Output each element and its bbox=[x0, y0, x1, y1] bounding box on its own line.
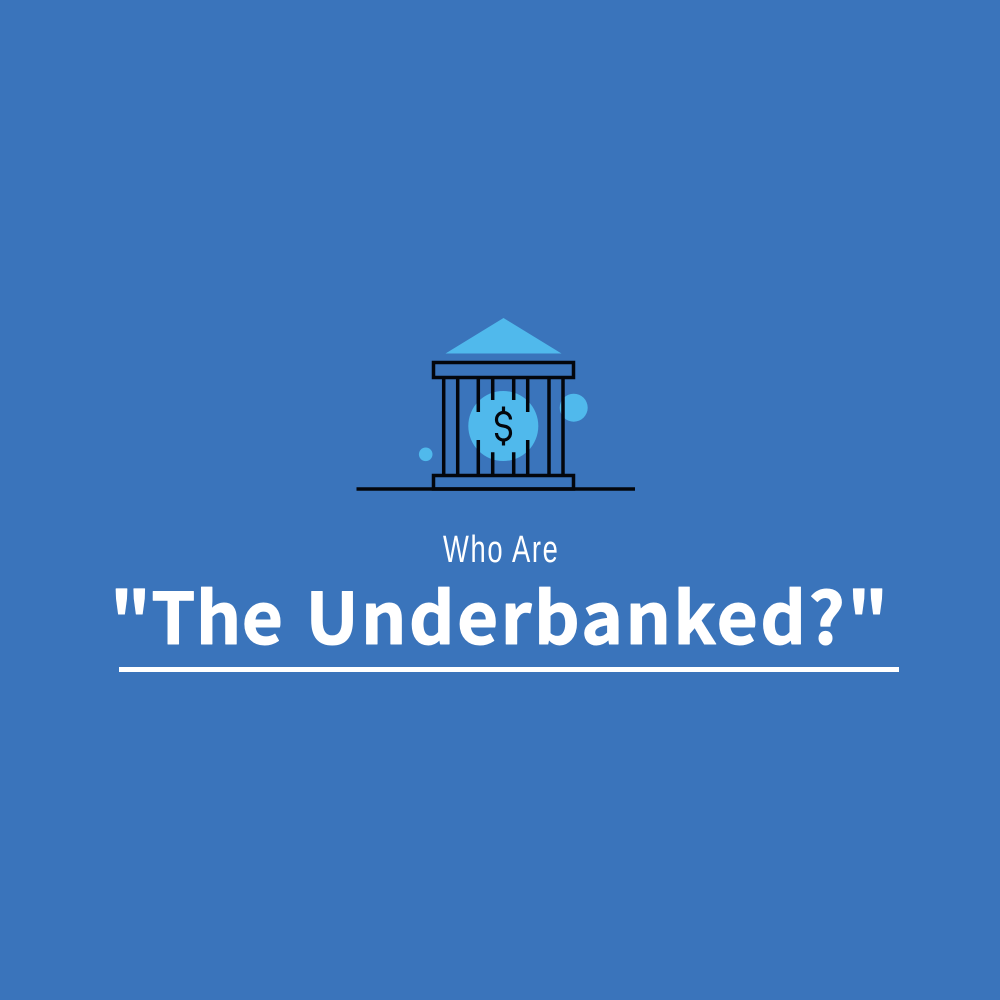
icon: base plinth bbox=[434, 476, 574, 489]
icon: entablature bbox=[434, 362, 574, 378]
icon: dollar sign bbox=[496, 406, 510, 446]
subtitle: Who Are bbox=[443, 529, 560, 571]
title underline bbox=[119, 667, 899, 672]
icon: small bubble right bbox=[560, 394, 588, 422]
title: Underbanked?" bbox=[306, 563, 888, 665]
title: "The bbox=[110, 563, 283, 665]
icon: ground line bbox=[356, 487, 635, 491]
icon: building columns bbox=[444, 378, 563, 475]
icon: large coin circle bbox=[468, 391, 538, 461]
icon: bank building with dollar behind bars bbox=[356, 318, 635, 489]
icon: small bubble left bbox=[419, 448, 433, 461]
icon: roof triangle bbox=[446, 318, 562, 354]
